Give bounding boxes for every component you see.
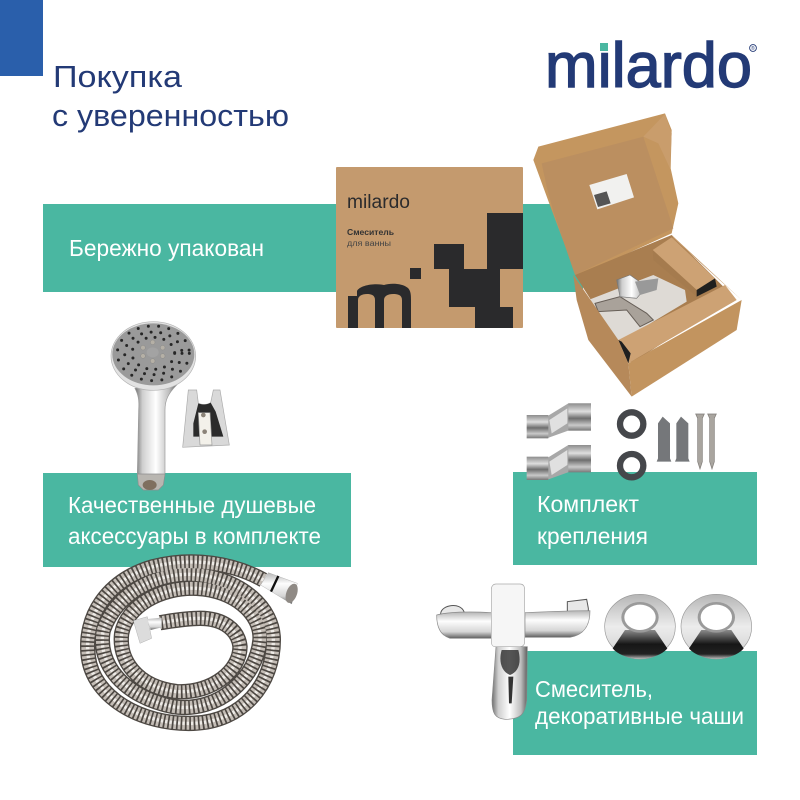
- label: mounting kit: Комплект: [537, 491, 639, 517]
- faucet in box: [595, 297, 653, 327]
- label: shower accessories: аксессуары в комплекте: [68, 523, 321, 549]
- label: faucet: декоративные чаши: [535, 703, 744, 729]
- label: packaging: Бережно упакован: [69, 235, 264, 261]
- box interior: [575, 235, 733, 363]
- closed cardboard box: Смеситель: [347, 228, 394, 237]
- title: с уверенностью: [52, 98, 289, 133]
- label: shower accessories: [68, 492, 321, 549]
- hex connector: [133, 617, 162, 643]
- conical connector: [261, 573, 300, 605]
- teal band: faucet: [513, 651, 757, 755]
- teal band: mounting kit: [513, 472, 757, 565]
- open cardboard box with faucet: [533, 113, 742, 397]
- mounting kit: [527, 403, 716, 480]
- hand shower head: [111, 322, 196, 490]
- elbow adapter 1: [527, 403, 591, 438]
- centre nozzles: [147, 347, 159, 357]
- rubber gasket 2: [620, 454, 643, 477]
- threaded nozzle: [137, 474, 165, 490]
- box lid: [533, 113, 678, 277]
- closed cardboard box: для ванны: [347, 239, 391, 248]
- title: [52, 59, 289, 133]
- spray nozzles: [117, 326, 189, 381]
- label: shower accessories: Качественные душевые: [68, 492, 316, 518]
- teal band: shower accessories: [43, 473, 351, 567]
- tissue paper: [588, 275, 687, 342]
- closed cardboard box: milardo: [347, 192, 410, 213]
- label: faucet: Смеситель,: [535, 676, 653, 702]
- decorative cup 1: [605, 594, 675, 659]
- logo: milardo: ®: [751, 45, 755, 52]
- decorative cup 2: [681, 594, 752, 659]
- handle: [135, 385, 177, 476]
- label: mounting kit: [537, 491, 648, 549]
- elbow adapter 2: [527, 445, 591, 480]
- label: faucet: [535, 676, 744, 729]
- teal band: packaging: [43, 204, 583, 292]
- wall plug 1: [657, 417, 671, 462]
- rim: [111, 322, 196, 390]
- rubber gasket 1: [620, 412, 643, 436]
- wall plug 2: [675, 417, 690, 462]
- spray face: [112, 323, 194, 385]
- label: mounting kit: крепления: [537, 523, 648, 549]
- closed cardboard box: [336, 167, 523, 328]
- faucet and decorative cups: [437, 584, 752, 719]
- hose coils: [88, 562, 273, 723]
- flexible shower hose: [88, 562, 300, 723]
- faucet body: [437, 584, 590, 719]
- screw 1: [696, 414, 704, 469]
- title: Покупка: [53, 59, 183, 94]
- corner accent block: [0, 0, 43, 76]
- shower holder bracket: [183, 390, 229, 447]
- lid label: [589, 174, 634, 209]
- inner cardboard block: [653, 237, 715, 290]
- front flap and walls: [618, 285, 737, 363]
- logo: milardo: milardo: [545, 31, 752, 101]
- screw 2: [708, 414, 716, 469]
